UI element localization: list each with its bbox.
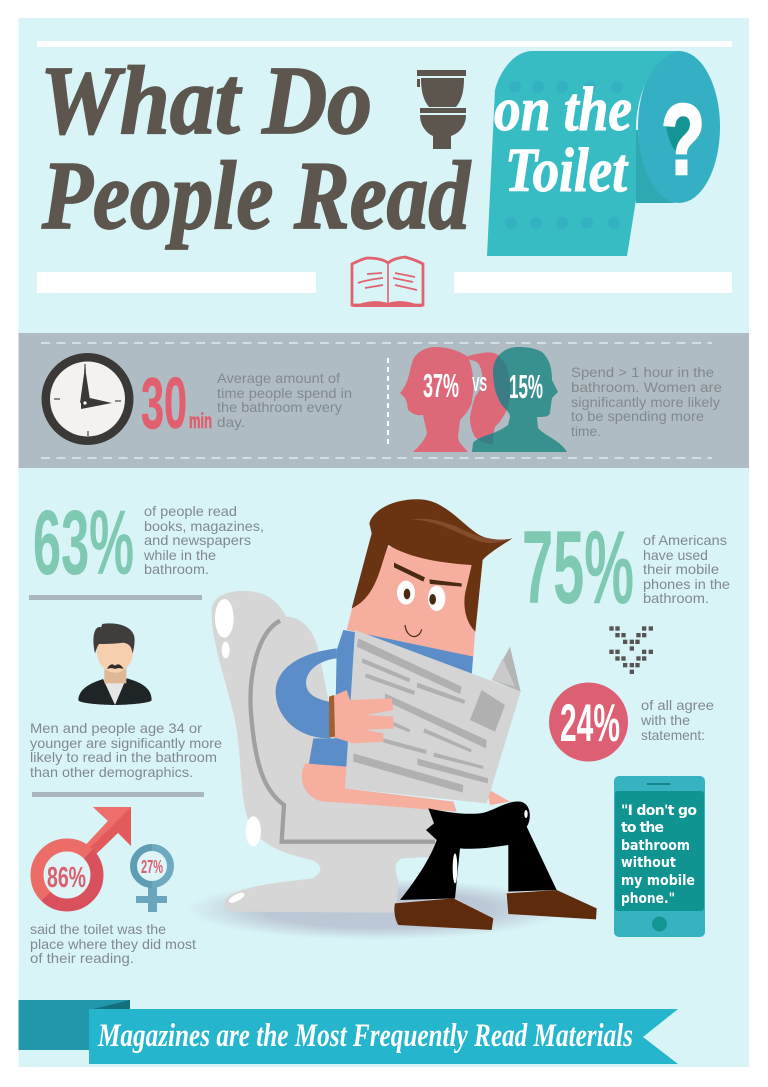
text: average amount of time <box>217 370 352 430</box>
title line 2: People Read <box>41 142 471 249</box>
stat: 30 min: min <box>189 410 212 433</box>
illustration: man reading newspaper on toilet <box>187 499 597 940</box>
icon: man silhouette <box>465 347 567 452</box>
title line 1: What Do <box>40 47 372 154</box>
text: Americans mobile phones: their mobile <box>643 561 719 577</box>
text: of all agree <box>640 697 714 743</box>
shoes <box>394 890 597 930</box>
stat: 37% vs 15%: 15% <box>509 368 543 405</box>
top white bar <box>37 41 732 47</box>
text: Americans mobile phones: have used <box>643 547 708 563</box>
stat: 30 min: 30 <box>141 364 187 444</box>
text: people read books <box>143 503 264 577</box>
divider 1 <box>29 595 202 600</box>
stat: 37% vs 15%: 37% <box>423 367 459 404</box>
legs skin <box>302 763 510 812</box>
text: people read books: bathroom. <box>144 561 209 577</box>
stat: 63%: 63% <box>33 492 134 594</box>
text: men and people age 34: younger are significantly more <box>30 735 222 751</box>
text: on the: on the <box>494 76 632 144</box>
question mark shadow <box>666 107 693 153</box>
text: 24%: 24% <box>560 694 620 753</box>
text: 86%: 86% <box>47 862 86 894</box>
trousers <box>400 802 557 900</box>
icon: pixel chevrons <box>609 626 653 674</box>
text: men and people age 34 <box>30 720 222 780</box>
icon: open book <box>352 257 423 307</box>
text: men and people age 34: than other demographics. <box>30 764 193 780</box>
white bar right <box>454 272 732 293</box>
text: said the toilet: of their reading. <box>30 950 134 966</box>
icon: toilet paper roll <box>487 51 720 256</box>
stat: 75%: 75% <box>522 510 634 626</box>
text: spend over one hour: to be spending more <box>571 408 704 424</box>
newspaper <box>345 630 521 803</box>
icon: female symbol 27% <box>134 848 170 912</box>
text: Toilet: Toilet <box>505 137 629 205</box>
text: Americans mobile phones: phones in the <box>643 576 730 592</box>
text: phone quote: to the <box>621 820 664 836</box>
text: men and people age 34: Men and people age 34 or <box>30 720 202 736</box>
text: 27%: 27% <box>141 857 163 877</box>
stat: 37% vs 15%: VS <box>472 374 487 396</box>
text: phone quote <box>621 803 697 907</box>
text: phone quote: without <box>621 855 676 871</box>
stat: 24% circle <box>549 682 628 762</box>
icon: mobile phone with quote <box>614 776 705 937</box>
text: men and people age 34: likely to read in the bathroom <box>30 749 217 765</box>
text: of all agree: of all agree <box>641 697 714 713</box>
text: phone quote: bathroom <box>621 838 690 854</box>
text: average amount of time: the bathroom every <box>217 399 342 415</box>
stat: 37% vs 15% <box>423 367 543 405</box>
text: said the toilet: said the toilet was the <box>30 921 166 937</box>
toilet <box>212 591 437 913</box>
white bar left <box>37 272 316 293</box>
text: people read books: books, magazines, <box>144 518 264 534</box>
text: Americans mobile phones: of Americans <box>643 532 727 548</box>
icon: woman silhouette <box>400 347 510 452</box>
text: said the toilet: place where they did most <box>30 936 196 952</box>
panel: gray stats band <box>18 333 749 468</box>
icon: man with moustache <box>78 623 152 705</box>
text: Americans mobile phones <box>643 532 730 606</box>
text: Americans mobile phones: bathroom. <box>643 590 709 606</box>
icon: toilet <box>417 70 466 149</box>
text: spend over one hour: bathroom. Women are <box>571 379 722 395</box>
head <box>347 499 513 657</box>
text: people read books: of people read <box>144 503 237 519</box>
text: phone quote: phone." <box>621 891 675 907</box>
text: people read books: while in the <box>143 547 216 563</box>
text: of all agree: with the <box>640 712 690 728</box>
text: of all agree: statement: <box>641 727 705 743</box>
text: people read books: and newspapers <box>144 532 251 548</box>
text: said the toilet <box>30 921 196 966</box>
text: average amount of time: Average amount of <box>217 370 340 386</box>
divider 2 <box>32 792 204 797</box>
banner ribbon <box>18 1000 678 1064</box>
text: spend over one hour: Spend > 1 hour in the <box>571 364 714 380</box>
text: question mark: ? <box>661 84 705 196</box>
text: spend over one hour <box>571 364 722 439</box>
floor shadow <box>187 879 567 940</box>
text: average amount of time: day. <box>217 414 245 430</box>
title: What Do People Read <box>40 47 471 249</box>
text: phone quote: my mobile <box>621 873 695 889</box>
hand <box>329 690 393 743</box>
shirt <box>276 630 473 767</box>
text: average amount of time: time people spend in <box>217 385 352 401</box>
text: spend over one hour: time. <box>571 423 601 439</box>
text: spend over one hour: significantly more likely <box>571 394 720 410</box>
icon: male symbol 86% <box>37 807 131 905</box>
text: phone quote: "I don't go <box>621 803 697 819</box>
icon: clock <box>42 353 134 445</box>
